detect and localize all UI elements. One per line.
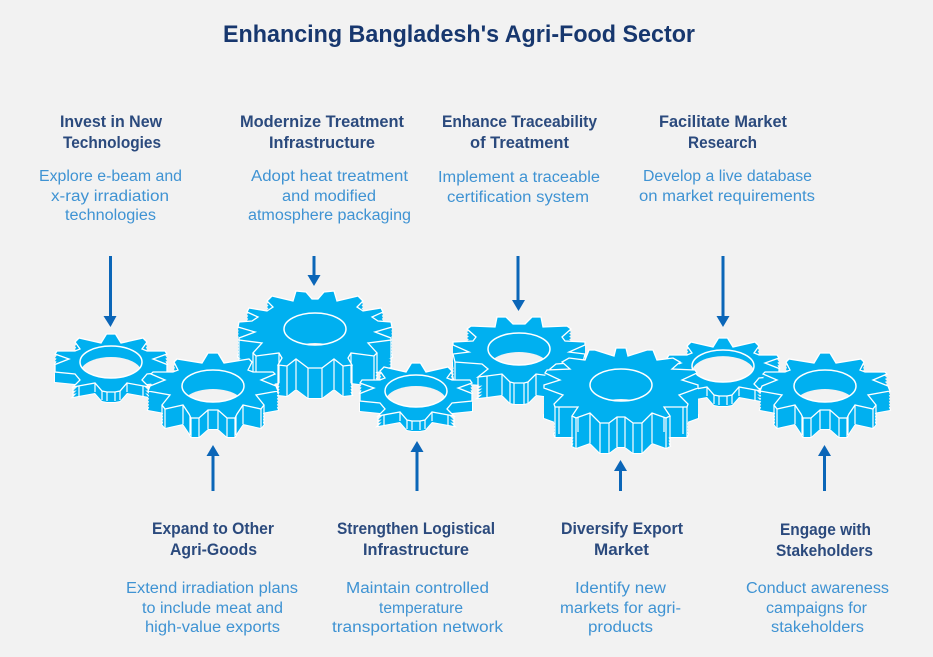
panel: diversify export market bbox=[560, 520, 683, 636]
text: invest description: x-ray irradiation bbox=[51, 188, 169, 205]
text: logistics description bbox=[332, 580, 503, 636]
heading: invest in new technologies: Technologies bbox=[63, 134, 161, 152]
text: market research description bbox=[639, 168, 815, 205]
heading: facilitate market research: Research bbox=[688, 134, 757, 152]
text: expand description: to include meat and bbox=[142, 600, 283, 617]
text: modernize description: Adopt heat treatment bbox=[251, 168, 409, 185]
text: invest description bbox=[39, 168, 182, 224]
heading: modernize treatment infrastructure bbox=[240, 113, 404, 152]
text: export description: products bbox=[588, 619, 653, 636]
text: logistics description: temperature bbox=[379, 600, 463, 617]
heading: modernize treatment infrastructure: Infrastructure bbox=[269, 134, 375, 152]
heading: enhance traceability of treatment: Enhance Traceability bbox=[442, 113, 598, 131]
text: invest description: technologies bbox=[65, 207, 156, 224]
text: market research description: on market requirements bbox=[639, 188, 815, 205]
gear 4 bbox=[360, 363, 472, 431]
panel: enhance traceability of treatment bbox=[438, 113, 600, 206]
heading: facilitate market research: Facilitate Market bbox=[659, 113, 787, 131]
heading: engage with stakeholders: Stakeholders bbox=[776, 542, 873, 560]
panel: facilitate market research bbox=[639, 113, 815, 205]
text: traceability description bbox=[438, 169, 600, 206]
heading: strengthen logistical infrastructure bbox=[337, 520, 495, 559]
text: stakeholders description: stakeholders bbox=[771, 619, 864, 636]
text: modernize description: and modified bbox=[282, 188, 376, 205]
text: modernize description: atmosphere packaging bbox=[248, 207, 411, 224]
heading: diversify export market: Market bbox=[594, 541, 650, 559]
heading: expand to other agri-goods: Agri-Goods bbox=[170, 541, 257, 559]
panel: modernize treatment infrastructure bbox=[240, 113, 411, 224]
text: logistics description: transportation network bbox=[332, 619, 503, 636]
text: export description: markets for agri- bbox=[560, 600, 681, 617]
text: expand description bbox=[126, 580, 298, 636]
text: expand description: high-value exports bbox=[145, 619, 280, 636]
heading: invest in new technologies: Invest in New bbox=[60, 113, 162, 131]
text: stakeholders description bbox=[746, 580, 889, 636]
gear 3 bbox=[238, 291, 392, 398]
gear 1 bbox=[55, 334, 167, 402]
text: market research description: Develop a live database bbox=[643, 168, 812, 185]
arrow: traceability to gear 5 bbox=[512, 256, 525, 311]
text: stakeholders description: Conduct awareness bbox=[746, 580, 889, 597]
text: logistics description: Maintain controlled bbox=[346, 580, 489, 597]
heading: diversify export market bbox=[561, 520, 683, 559]
heading: engage with stakeholders: Engage with bbox=[780, 521, 871, 539]
gear 2 bbox=[148, 353, 278, 437]
text: invest description: Explore e-beam and bbox=[39, 168, 182, 185]
title: Enhancing Bangladesh's Agri-Food Sector bbox=[223, 21, 695, 48]
heading: modernize treatment infrastructure: Modernize Treatment bbox=[240, 113, 404, 131]
heading: facilitate market research bbox=[659, 113, 787, 152]
arrow: market research to gear 7 bbox=[716, 256, 730, 327]
heading: expand to other agri-goods: Expand to Other bbox=[152, 520, 275, 538]
gear 8 bbox=[760, 353, 890, 437]
heading: invest in new technologies bbox=[60, 113, 162, 152]
gear 7 bbox=[667, 338, 779, 406]
gear 5 bbox=[453, 317, 585, 404]
text: export description bbox=[560, 580, 681, 636]
panel: expand to other agri-goods bbox=[126, 520, 298, 636]
heading: diversify export market: Diversify Export bbox=[561, 520, 683, 538]
arrow: invest to gear 1 bbox=[104, 256, 116, 327]
arrow: gear 4 to logistics bbox=[410, 441, 424, 491]
arrow: gear 6 to export market bbox=[614, 460, 627, 491]
panel: engage with stakeholders bbox=[746, 521, 889, 636]
panel: strengthen logistical infrastructure bbox=[332, 520, 503, 636]
text: modernize description bbox=[248, 168, 411, 224]
text: export description: Identify new bbox=[575, 580, 667, 597]
text: traceability description: Implement a traceable bbox=[438, 169, 600, 186]
text: stakeholders description: campaigns for bbox=[766, 600, 867, 617]
arrow: gear 8 to stakeholders bbox=[818, 445, 831, 491]
heading: engage with stakeholders bbox=[776, 521, 873, 560]
heading: strengthen logistical infrastructure: Strengthen Logistical bbox=[337, 520, 495, 538]
arrow: gear 2 to other goods bbox=[206, 445, 220, 491]
panel: invest in new technologies bbox=[39, 113, 182, 224]
heading: enhance traceability of treatment bbox=[442, 113, 598, 152]
text: traceability description: certification system bbox=[447, 189, 589, 206]
heading: expand to other agri-goods bbox=[152, 520, 275, 559]
text: expand description: Extend irradiation plans bbox=[126, 580, 298, 597]
heading: enhance traceability of treatment: of Treatment bbox=[470, 134, 569, 152]
gear chain bbox=[55, 291, 890, 453]
gear 6 bbox=[544, 348, 698, 453]
heading: strengthen logistical infrastructure: Infrastructure bbox=[363, 541, 469, 559]
arrow: modernize to gear 3 bbox=[308, 256, 320, 286]
